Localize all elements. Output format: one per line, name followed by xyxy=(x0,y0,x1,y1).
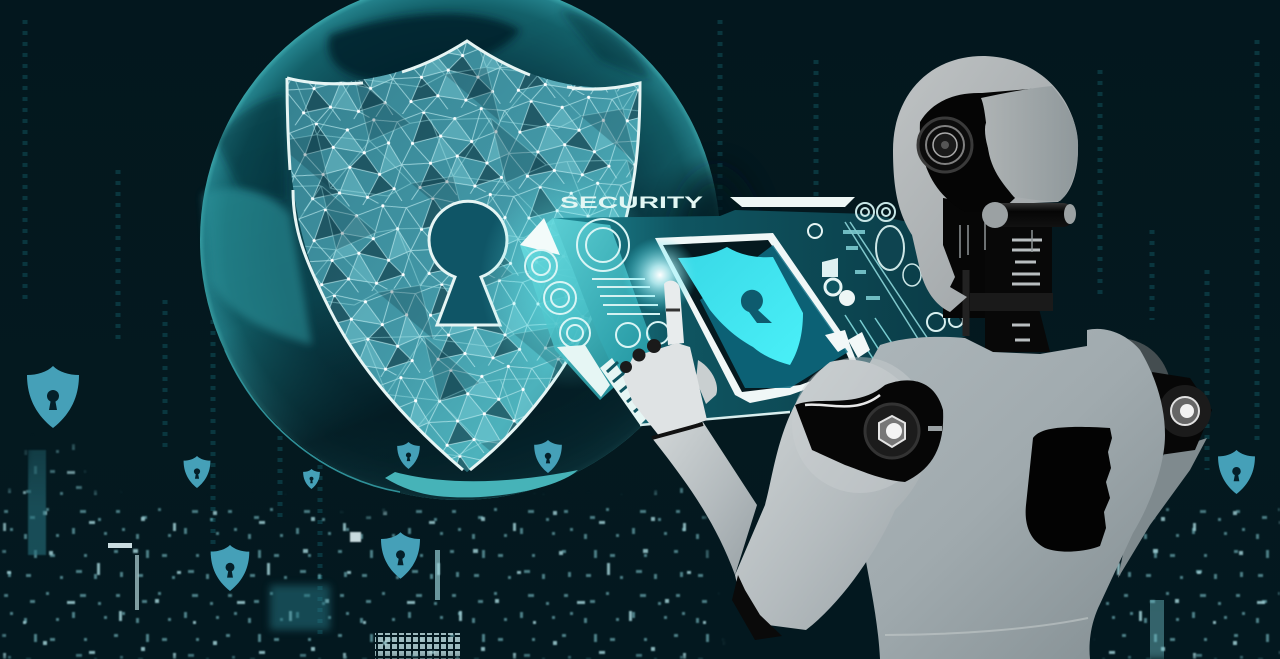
globe shading xyxy=(200,0,720,500)
neck tube xyxy=(985,203,1073,227)
lower chevron xyxy=(557,345,610,397)
city skyline lights xyxy=(0,430,1280,659)
torso xyxy=(820,329,1165,659)
white triangle xyxy=(520,218,560,255)
elbow joint xyxy=(732,575,782,640)
main wireframe shield xyxy=(280,35,645,480)
globe continents xyxy=(215,10,650,200)
panel top circles xyxy=(856,203,895,221)
neck xyxy=(943,198,1053,352)
tablet keyhole xyxy=(741,290,772,323)
right side shadow xyxy=(670,170,760,390)
waist line xyxy=(885,618,1088,635)
panel body xyxy=(553,210,968,425)
lower rim xyxy=(225,350,400,492)
forearm xyxy=(652,422,757,575)
white nodes xyxy=(825,330,870,358)
eye lens xyxy=(918,118,972,172)
palm xyxy=(623,343,707,437)
chest hole xyxy=(1026,427,1112,552)
thumb xyxy=(696,360,717,404)
knuckles xyxy=(620,361,632,373)
far arm xyxy=(1118,438,1207,578)
tablet xyxy=(655,233,860,403)
finger flare xyxy=(622,237,698,313)
striped strip xyxy=(600,358,650,425)
head xyxy=(893,56,1078,312)
near shoulder ball xyxy=(792,357,928,493)
head side panel xyxy=(981,86,1078,201)
far shoulder cap xyxy=(1120,338,1170,440)
shield outline xyxy=(287,41,640,470)
security label: SECURITY xyxy=(560,193,704,212)
head shell xyxy=(893,56,1078,312)
panel top bar xyxy=(730,197,855,207)
index finger xyxy=(664,281,684,345)
cyan glow xyxy=(480,170,660,390)
near upper arm xyxy=(735,360,931,630)
wing dials xyxy=(525,219,669,348)
wrist cuff xyxy=(652,424,703,438)
panel right widgets xyxy=(808,222,963,385)
left wing xyxy=(520,218,655,400)
tablet shield xyxy=(678,247,803,365)
neck rod xyxy=(962,270,970,336)
bottom crescent xyxy=(385,470,578,497)
collar xyxy=(970,293,1053,311)
head face black xyxy=(920,87,1053,212)
left landmass xyxy=(203,188,312,345)
robot xyxy=(620,56,1212,659)
keyhole xyxy=(429,201,507,325)
small shield icons xyxy=(27,366,1255,591)
hand xyxy=(620,281,717,438)
near shoulder joint xyxy=(795,380,943,482)
globe xyxy=(200,0,760,500)
security panel xyxy=(480,170,968,425)
wing text lines xyxy=(592,279,660,314)
far shoulder joint xyxy=(1152,372,1212,455)
panel bottom edge xyxy=(640,412,790,425)
